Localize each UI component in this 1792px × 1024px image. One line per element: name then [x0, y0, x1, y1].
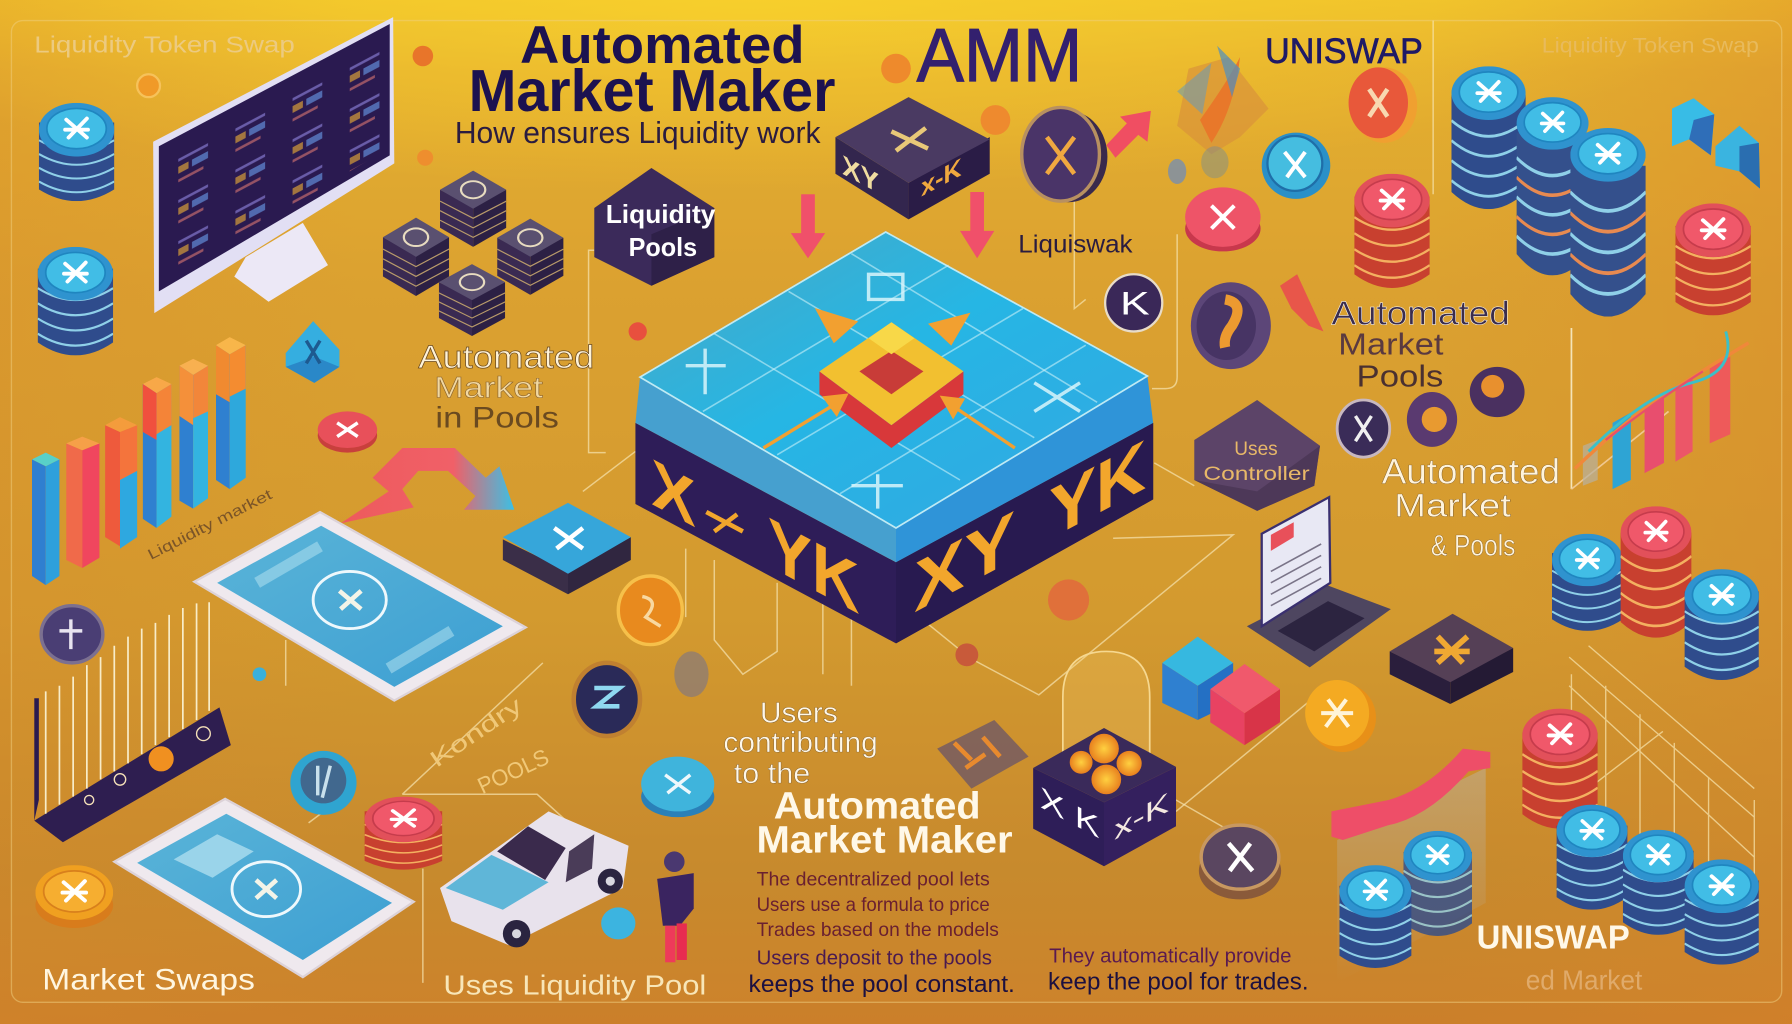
faint diagonal label: pools: Kondry: [425, 691, 527, 772]
text: automated market pools white: Market: [1394, 488, 1511, 524]
text: automated market pools white: & Pools: [1431, 529, 1515, 562]
pink turning arrow: [341, 448, 514, 523]
text: automated market in pools: in Pools: [435, 401, 559, 434]
bar chart: left: [32, 337, 246, 585]
text: automated market pools white: [1382, 451, 1560, 562]
hex: uses controller: Controller: [1203, 463, 1310, 485]
blue cubes: top right: [1672, 98, 1760, 189]
dark coin: [1199, 825, 1281, 899]
text: automated market pools right: [1331, 296, 1510, 393]
cubes: blue and red: [1162, 637, 1280, 745]
data stacks: four dark blocks: [383, 171, 563, 336]
text block: users contributing: [723, 697, 878, 790]
floating accent tokens: [253, 54, 1089, 697]
letters on base: XY: [914, 495, 1015, 628]
text block: keep the pool: keep the pool for trades.: [1048, 969, 1309, 996]
coin stack: left top: [39, 103, 114, 201]
text block: users contributing: Users: [760, 697, 838, 729]
treasure box: [1033, 651, 1176, 866]
text: automated market pools right: Pools: [1357, 358, 1443, 393]
blue coin: top: [1262, 133, 1330, 199]
person: [657, 851, 694, 962]
pool grid lines: [703, 254, 1097, 494]
letters on base: X: [651, 445, 696, 542]
text block: description: The decentralized pool lets: [757, 869, 990, 891]
hex badge: [574, 663, 640, 736]
hexagon: liquidity pools: Liquidity: [606, 199, 716, 229]
kk coin: K: [1120, 285, 1150, 321]
caption along bar chart: Liquidity market: [145, 487, 276, 564]
letters on base: [651, 424, 1146, 630]
grid chart lines: [1569, 646, 1754, 937]
hexagon: liquidity pools: Pools: [629, 232, 697, 262]
text: market swaps: Market Swaps: [42, 964, 255, 997]
title: Market Maker: [469, 57, 835, 124]
letters on base: YK: [768, 502, 859, 630]
orange coin: [618, 576, 682, 645]
red arrow: left: [791, 194, 825, 258]
tablet: lower: [114, 799, 414, 977]
laptop: [1247, 497, 1391, 667]
red tag arrow: [1280, 274, 1323, 331]
purple coin: [41, 606, 103, 663]
fence line chart: [34, 602, 231, 842]
coin stacks: blue cluster: [1451, 66, 1646, 317]
large purple coin: [1022, 107, 1107, 202]
pink arrow to uniswap: [1106, 111, 1151, 158]
text block: users contributing: contributing: [723, 727, 878, 759]
text: automated market maker: [757, 784, 1013, 861]
pool tokens: [686, 274, 1080, 509]
coin stack: red right: [1675, 203, 1751, 315]
hexagon: liquidity pools: [594, 168, 716, 286]
purple coin: orange glyph: [1191, 282, 1271, 369]
faint header: token swap right: Liquidity Token Swap: [1542, 33, 1759, 58]
heading: AMM: AMM: [917, 13, 1082, 97]
blue hexagon icon: [286, 321, 339, 383]
blue coin: [290, 751, 357, 815]
tablet: upper: [194, 512, 526, 701]
small tokens: right: [1337, 367, 1525, 457]
red arrow: right: [960, 192, 994, 258]
text block: users contributing: to the: [734, 758, 810, 790]
small blue gem: [601, 907, 635, 939]
small cube: xy=k: XY: [842, 149, 879, 200]
text: automated market pools right: Automated: [1331, 296, 1510, 333]
text: uniswap white: UNISWAP: [1477, 920, 1630, 957]
text: uses liquidity pool: Uses Liquidity Pool: [443, 969, 706, 1000]
small cube: xy=k: [835, 97, 990, 219]
text block: description: [749, 869, 1015, 998]
treasure box: x-K: [1114, 786, 1170, 847]
coin stacks: lower right: [1552, 506, 1759, 680]
rising red arrow chart: [1331, 749, 1490, 983]
faint header: token swap left: Liquidity Token Swap: [34, 32, 295, 58]
title: Automated: [520, 16, 805, 75]
coin stack: red upper: [1354, 174, 1430, 288]
text block: keep the pool: [1048, 944, 1309, 996]
faint diagonal label: pools: [425, 691, 553, 799]
token stack block: [503, 503, 631, 594]
text: automated market pools white: Automated: [1382, 451, 1560, 491]
line and bar chart: right: [1571, 328, 1749, 489]
small orange coin: [137, 46, 433, 166]
car: [440, 811, 629, 947]
text: automated market pools right: Market: [1338, 326, 1444, 361]
text block: description: keeps the pool constant.: [749, 971, 1015, 998]
monitor: [153, 17, 394, 313]
hex: uses controller: Uses: [1234, 438, 1278, 460]
coin stack: left lower: [38, 247, 113, 355]
uniswap emblem: [1168, 46, 1269, 184]
text: automated market maker: Market Maker: [757, 819, 1013, 861]
blue coin centre: [641, 757, 714, 817]
orange coin stack: left: [35, 865, 113, 928]
text: automated market in pools: [418, 339, 594, 434]
text block: description: Users deposit to the pools: [757, 947, 992, 970]
gold centre ring: [819, 322, 963, 448]
red coin: top: [1185, 187, 1261, 251]
text block: description: Users use a formula to price: [757, 894, 990, 916]
inward arrows: [763, 311, 1015, 448]
faint diagonal label: pools: POOLS: [473, 743, 553, 799]
text: automated market in pools: Automated: [418, 339, 594, 375]
chart icon near text: [937, 720, 1029, 789]
kk coin: [1105, 274, 1162, 331]
coin stacks: bottom right red: [1522, 709, 1598, 829]
treasure box: X K: [1040, 780, 1099, 845]
red coin: [318, 411, 377, 453]
letters on base: YK: [1049, 424, 1146, 555]
gold token plate: [1390, 614, 1513, 704]
central pool platform: [635, 232, 1153, 643]
coin stacks: bottom right blue: [1339, 805, 1759, 968]
subtitle: How ensures Liquidity work: [455, 115, 821, 150]
small cube: xy=k: x-K: [921, 152, 962, 202]
text: faint automated market: ed Market: [1526, 965, 1643, 996]
text: automated market maker: Automated: [774, 784, 981, 826]
text block: description: Trades based on the models: [757, 919, 999, 941]
heading: UNISWAP: UNISWAP: [1265, 31, 1423, 71]
title: [469, 16, 835, 124]
orange coin: top: [1349, 67, 1417, 143]
text: liquiswak: Liquiswak: [1018, 231, 1133, 259]
connector lines: [286, 21, 1433, 983]
coin stack: red left: [365, 797, 442, 870]
text: automated market in pools: Market: [434, 372, 544, 405]
text block: keep the pool: They automatically provide: [1049, 944, 1291, 967]
hex: uses controller: [1194, 400, 1320, 511]
gold coin: [1305, 680, 1376, 752]
